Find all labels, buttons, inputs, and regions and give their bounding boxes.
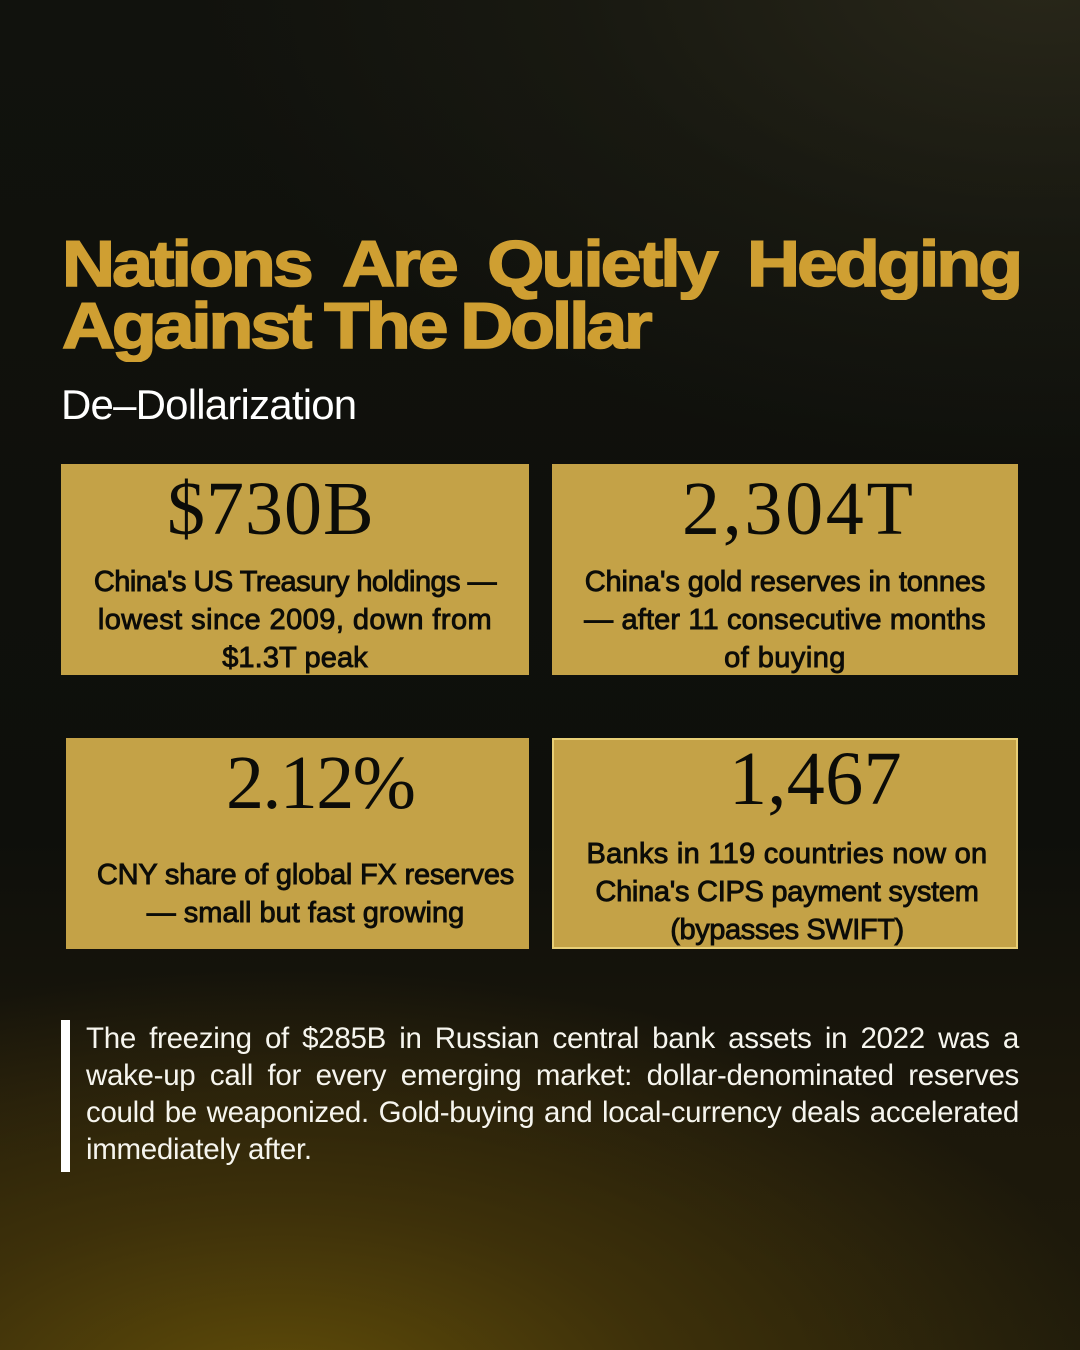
callout text: a [1003, 1022, 1019, 1055]
description: CIPS: China's CIPS payment system [595, 876, 979, 908]
description: treasury: lowest since 2009, down from [98, 604, 492, 636]
description: treasury: China's US Treasury holdings — [94, 566, 496, 598]
callout text: 2022 [860, 1022, 925, 1055]
callout text: be [165, 1096, 197, 1129]
callout text: reserves [908, 1059, 1019, 1092]
description: gold: — after 11 consecutive months [584, 604, 986, 636]
callout text: Gold-buying [379, 1096, 534, 1129]
callout text: in [399, 1022, 422, 1055]
panel: gold reserves [552, 464, 1018, 675]
callout text: accelerated [870, 1096, 1019, 1129]
title: Are [342, 227, 456, 300]
stat: 2.12%: 2.12% [226, 741, 414, 825]
description: gold: China's gold reserves in tonnes [585, 566, 985, 598]
callout text: Russian [435, 1022, 539, 1055]
stat: 1,467: 1,467 [729, 737, 902, 821]
callout text: every [316, 1059, 386, 1092]
description: gold [584, 566, 986, 674]
subtitle: De–Dollarization [61, 381, 356, 428]
callout text [86, 1022, 1020, 1166]
panel: treasury holdings [61, 464, 529, 675]
title: Against The Dollar [62, 289, 649, 362]
stat: $730B: $730B [167, 467, 375, 551]
callout text: in [825, 1022, 847, 1055]
title: Hedging [747, 227, 1020, 300]
callout accent bar [61, 1020, 70, 1172]
callout text: dollar-denominated [647, 1059, 894, 1092]
description: CNY [97, 859, 514, 929]
callout text: market: [536, 1059, 632, 1092]
callout text: and [544, 1096, 592, 1129]
callout text: $285B [302, 1022, 386, 1055]
panel: CIPS banks [552, 738, 1018, 949]
panel: CNY share [66, 738, 529, 949]
description: CIPS: (bypasses SWIFT) [670, 914, 904, 946]
title [62, 227, 1020, 362]
callout text: bank [652, 1022, 715, 1055]
description: treasury: $1.3T peak [222, 642, 368, 674]
callout text: immediately after. [86, 1133, 312, 1166]
callout text: The [86, 1022, 136, 1055]
title: Quietly [487, 227, 716, 300]
description: treasury [94, 566, 498, 674]
stat: 2,304T: 2,304T [682, 467, 916, 551]
callout text: assets [728, 1022, 812, 1055]
callout text: call [210, 1059, 253, 1092]
description: CIPS [587, 838, 987, 946]
callout text: local-currency [602, 1096, 781, 1129]
callout text: wake-up [86, 1059, 195, 1092]
callout text: central [552, 1022, 639, 1055]
callout text: could [86, 1096, 155, 1129]
description: gold: of buying [724, 642, 846, 674]
description: CNY: CNY share of global FX reserves [97, 859, 514, 891]
callout text: of [265, 1022, 289, 1055]
description: CNY: — small but fast growing [147, 897, 464, 929]
callout text: for [268, 1059, 301, 1092]
title: Nations [62, 227, 311, 300]
callout text: was [938, 1022, 990, 1055]
description: CIPS: Banks in 119 countries now on [587, 838, 987, 870]
callout text: deals [791, 1096, 860, 1129]
callout text: emerging [401, 1059, 521, 1092]
callout text: freezing [149, 1022, 252, 1055]
callout text: weaponized. [207, 1096, 369, 1129]
